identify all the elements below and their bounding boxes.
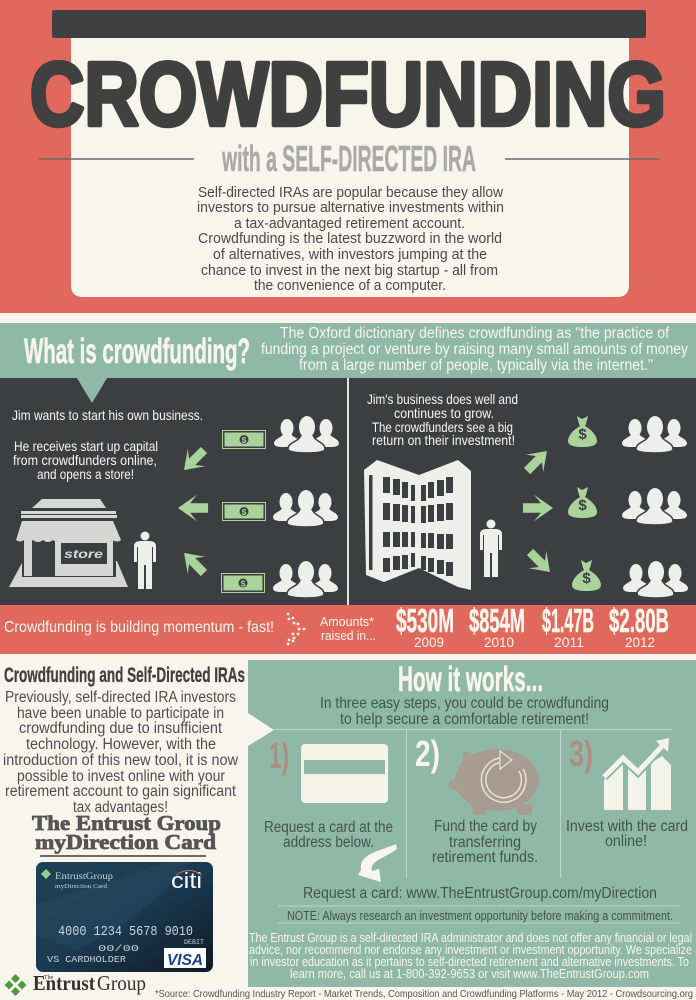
icon: crowd 2 bbox=[273, 490, 338, 527]
icon: store bbox=[9, 499, 128, 587]
step 3 text: Invest with the card bbox=[566, 818, 688, 835]
icon: office building bbox=[364, 460, 471, 590]
text: Jim's business grows: return on their investment! bbox=[372, 432, 515, 448]
heading: the entrust group mydirection card bbox=[32, 811, 221, 854]
notch bbox=[248, 713, 274, 746]
text: amounts raised: Amounts* bbox=[320, 614, 374, 629]
arrow: returns out, right bbox=[523, 495, 553, 521]
text block: previously: Previously, self-directed IRA investors bbox=[5, 689, 236, 706]
text block: previously: tax advantages! bbox=[73, 799, 168, 816]
step dividers bbox=[274, 729, 673, 878]
stat: 2012 bbox=[609, 602, 669, 650]
heading: the entrust group mydirection card: myDirection Card bbox=[35, 830, 216, 854]
dark top bar bbox=[52, 10, 646, 38]
icon: dollar bill 1 bbox=[222, 430, 266, 448]
intro text: In three easy steps, you could be crowdfunding bbox=[320, 695, 609, 712]
stat: 2009: 2009 bbox=[414, 634, 444, 650]
text block: previously: retirement account to gain significant bbox=[5, 783, 237, 800]
text block: previously: technology. However, with the bbox=[26, 736, 216, 753]
step 1 text: address below. bbox=[283, 834, 374, 851]
icon: crowd 6 bbox=[623, 561, 688, 598]
text: building momentum: Crowdfunding is building momentum - fast! bbox=[4, 619, 274, 636]
heading: how it works: How it works... bbox=[398, 660, 543, 699]
step 2 text: retirement funds. bbox=[432, 849, 538, 866]
icon: dollar bill 3: $ bbox=[241, 578, 246, 588]
image: debit card: 00/00 bbox=[98, 943, 139, 954]
icon: credit card bbox=[301, 744, 388, 803]
step 3 text: online! bbox=[605, 833, 647, 850]
step number 1: 1) bbox=[269, 735, 289, 776]
logo: The Entrust Group bbox=[4, 971, 146, 996]
intro paragraph: Crowdfunding is the latest buzzword in the world bbox=[198, 230, 502, 247]
text: amounts raised: raised in... bbox=[321, 628, 376, 643]
oxford definition: from a large number of people, typically via the internet." bbox=[299, 357, 653, 374]
icon: money bag 3: $ bbox=[582, 570, 591, 587]
step 2 text: transferring bbox=[449, 834, 521, 851]
icon: Jim person by building bbox=[480, 520, 502, 577]
arrow: returns out, diagonal down-right bbox=[521, 543, 559, 581]
panel: how it works bbox=[248, 660, 696, 987]
column divider bbox=[347, 378, 349, 605]
step 3 bbox=[566, 733, 688, 850]
icon: money bag 3 bbox=[572, 560, 601, 591]
image: debit card: VISA bbox=[167, 952, 203, 969]
image: debit card: myDirection Card bbox=[55, 884, 107, 890]
stat: 2010: 2010 bbox=[484, 634, 514, 650]
logo: The Entrust Group: Entrust bbox=[33, 971, 95, 995]
icon: dollar bill 3 bbox=[222, 574, 264, 592]
image: debit card: citi bbox=[171, 868, 202, 893]
stat: 2012: 2012 bbox=[625, 634, 655, 650]
panel: crowdfunding and self-directed IRAs bbox=[3, 664, 245, 972]
stat: 2009 bbox=[396, 602, 454, 650]
text: Jim's business grows: continues to grow. bbox=[394, 405, 494, 421]
logo: The Entrust Group: The bbox=[44, 975, 54, 981]
text block: previously bbox=[3, 689, 239, 816]
icon: money bag 1: $ bbox=[578, 426, 587, 443]
step 2 bbox=[415, 733, 539, 866]
arrow: returns out, diagonal up-right bbox=[518, 442, 556, 480]
intro paragraph bbox=[197, 184, 504, 294]
text: Jim's business grows bbox=[367, 391, 518, 448]
step 1 text bbox=[264, 819, 393, 851]
logo: The Entrust Group: Group bbox=[97, 971, 146, 995]
intro paragraph: the convenience of a computer. bbox=[254, 277, 446, 294]
text: Jim wants to start bbox=[12, 407, 203, 482]
intro paragraph: Self-directed IRAs are popular because they allow bbox=[198, 184, 503, 201]
icon: money bag 1 bbox=[568, 416, 597, 447]
image: debit card: EntrustGroup bbox=[55, 871, 114, 881]
step 2 text bbox=[432, 818, 538, 866]
stat: 2010 bbox=[469, 602, 525, 650]
arrow: curved white pointing to request link bbox=[358, 844, 397, 882]
speech bubble tail bbox=[77, 378, 107, 403]
icon: dollar bill 2 bbox=[222, 502, 266, 520]
icon: piggy bank bbox=[448, 746, 539, 815]
step 2 text: Fund the card by bbox=[434, 818, 537, 835]
panel: momentum stat bar bbox=[0, 602, 696, 654]
stat: 2010: $854M bbox=[469, 602, 525, 639]
heading: what is crowdfunding: What is crowdfunding? bbox=[24, 332, 250, 371]
subtitle rules bbox=[39, 158, 660, 160]
icon: crowd 1 bbox=[274, 416, 339, 453]
icon: dollar bill 2: $ bbox=[242, 507, 247, 517]
panel: cream title card bbox=[71, 38, 629, 297]
intro text bbox=[320, 695, 609, 728]
text block: previously: introduction of this new tool, it is now bbox=[3, 752, 239, 769]
icon: money bag 2 bbox=[568, 487, 597, 518]
step number 3: 3) bbox=[569, 733, 593, 774]
icon: dollar bill 1: $ bbox=[242, 435, 247, 445]
intro paragraph: a tax-advantaged retirement account. bbox=[234, 215, 465, 232]
icon: Jim person by store bbox=[134, 532, 156, 589]
panel: what is crowdfunding banner bbox=[0, 323, 696, 378]
icon: dotted chevron bbox=[287, 613, 305, 645]
step number 2: 2) bbox=[415, 733, 440, 774]
request a card link: Request a card: www.TheEntrustGroup.com/myDirection bbox=[303, 885, 657, 902]
store sign text: store bbox=[64, 547, 103, 561]
panel: momentum stat bar: $1.47B bbox=[542, 602, 594, 639]
oxford definition bbox=[261, 325, 688, 374]
image: debit card bbox=[36, 862, 213, 972]
image: debit card: DEBIT bbox=[184, 939, 204, 946]
image: debit card: 4000 1234 5678 9010 bbox=[58, 924, 193, 940]
icon: crowd 5 bbox=[622, 488, 687, 525]
text: Jim wants to start: Jim wants to start his own business. bbox=[12, 407, 203, 423]
image: debit card: VS CARDHOLDER bbox=[47, 954, 126, 965]
text: Jim wants to start: and opens a store! bbox=[37, 466, 134, 482]
icon: growth chart bbox=[604, 738, 671, 810]
heading: crowdfunding and self-directed IRAs: Crowdfunding and Self-Directed IRAs bbox=[4, 664, 245, 687]
text: amounts raised bbox=[320, 614, 376, 643]
text block: previously: possible to invest online with your bbox=[17, 768, 225, 785]
step 1 bbox=[264, 735, 397, 882]
step 1 text: Request a card at the bbox=[264, 819, 393, 836]
intro paragraph: chance to invest in the next big startup - all from bbox=[201, 262, 498, 279]
stat: 2011 bbox=[542, 602, 594, 650]
disclaimer: learn more, call us at 1-800-392-9653 or visit www.TheEntrustGroup.com bbox=[290, 967, 649, 981]
heading: the entrust group mydirection card: The Entrust Group bbox=[32, 811, 221, 835]
disclaimer bbox=[249, 931, 692, 981]
arrow: funding in, diagonal up-left bbox=[175, 544, 213, 582]
step 3 text bbox=[566, 818, 688, 850]
intro paragraph: of alternatives, with investors jumping at the bbox=[213, 246, 487, 263]
text: Jim's business grows: The crowdfunders see a big bbox=[372, 419, 513, 435]
arrow: funding in, left bbox=[178, 495, 208, 521]
subtitle: with a SELF-DIRECTED IRA bbox=[221, 138, 476, 179]
intro paragraph: investors to pursue alternative investments within bbox=[197, 199, 504, 216]
intro text: to help secure a comfortable retirement! bbox=[340, 711, 589, 728]
oxford definition: The Oxford dictionary defines crowdfunding as "the practice of bbox=[280, 325, 670, 342]
text block: previously: crowdfunding due to insufficient bbox=[19, 720, 223, 737]
text: Jim wants to start: He receives start up capital bbox=[14, 438, 158, 454]
text: Jim wants to start: from crowdfunders online, bbox=[13, 452, 157, 468]
panel: title header bbox=[0, 0, 696, 313]
text block: previously: have been unable to participate in bbox=[17, 705, 224, 722]
stat: 2011: 2011 bbox=[554, 634, 584, 650]
icon: money bag 2: $ bbox=[578, 497, 587, 514]
stat: 2009: $530M bbox=[396, 602, 454, 639]
arrow: funding in, diagonal down-left bbox=[175, 441, 213, 479]
text: Jim's business grows: Jim's business does well and bbox=[367, 391, 518, 407]
icon: crowd 3 bbox=[273, 561, 338, 598]
icon: crowd 4 bbox=[622, 416, 687, 453]
panel: Jim story dark area bbox=[0, 378, 696, 605]
